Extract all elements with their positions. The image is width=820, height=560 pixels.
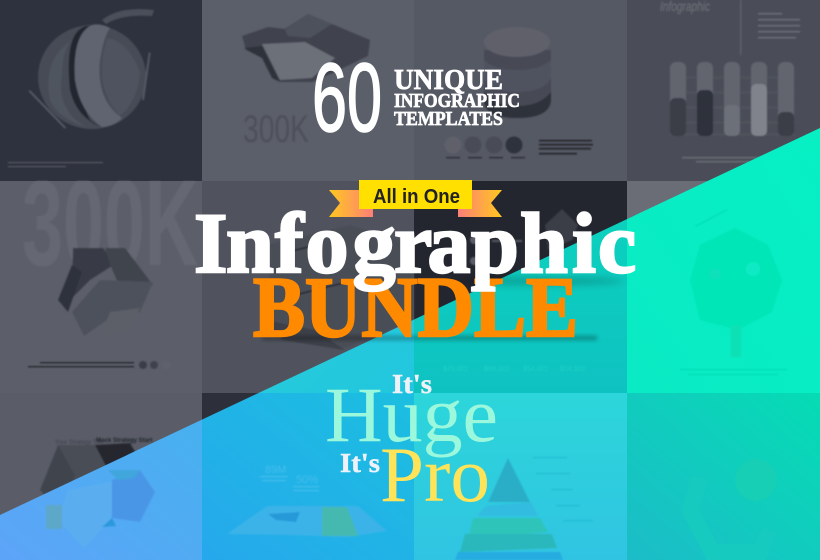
ribbon: all in one <box>329 180 502 217</box>
shadow below headline <box>262 277 625 340</box>
panel: cube template <box>24 180 195 370</box>
ribbon: all in one: All in One <box>373 186 460 208</box>
tagline: it's huge it's pro: It's <box>340 448 380 478</box>
panel: chevron cube template: Your Strategy Title <box>55 440 104 446</box>
big number label: 300K <box>243 108 309 151</box>
panel: puzzle template <box>242 14 370 151</box>
panel: sphere template <box>8 9 154 167</box>
heading: unique infographic templates: INFOGRAPHIC <box>394 90 520 112</box>
tagline: it's huge it's pro: Huge <box>325 371 498 458</box>
stats row: $24,322 <box>560 366 585 373</box>
large faded number: 300K <box>22 155 198 291</box>
step circles <box>444 136 522 154</box>
heading: unique infographic templates: TEMPLATES <box>394 108 503 130</box>
icon: hexagon tree <box>680 209 787 375</box>
stats row: $54,322 <box>523 366 548 373</box>
heading: infographic: Infographic <box>194 195 636 291</box>
tagline: it's huge it's pro <box>325 369 498 518</box>
panel: folded chart template <box>265 209 578 350</box>
stat labels: 50% <box>296 474 318 486</box>
panel: gradient diagonal overlay <box>0 120 820 560</box>
panel: chevron cube template: Mock Strategy Start <box>96 438 152 444</box>
panel: stacked cylinder template <box>444 27 593 158</box>
icon: gear ring <box>736 460 776 500</box>
icon: world map <box>227 506 387 537</box>
panel: tube bar chart template <box>660 0 800 162</box>
tagline: it's huge it's pro: Pro <box>380 431 490 518</box>
icon: chevron blocks <box>46 470 155 530</box>
tagline: it's huge it's pro: It's <box>392 369 432 399</box>
panel: chevron cube template <box>40 438 152 512</box>
stats row: $79,322 <box>443 366 468 373</box>
heading: unique infographic templates <box>394 65 520 130</box>
pyramid notes <box>533 457 593 521</box>
stats row <box>444 366 576 371</box>
heading: 60: 60 <box>312 43 382 152</box>
stat labels <box>260 464 319 491</box>
icon: pyramid <box>455 458 563 560</box>
heading: unique infographic templates: UNIQUE <box>394 65 503 96</box>
heading: bundle: BUNDLE <box>253 259 578 355</box>
stats row: $69,322 <box>484 366 509 373</box>
stat labels: 89M <box>265 464 286 476</box>
